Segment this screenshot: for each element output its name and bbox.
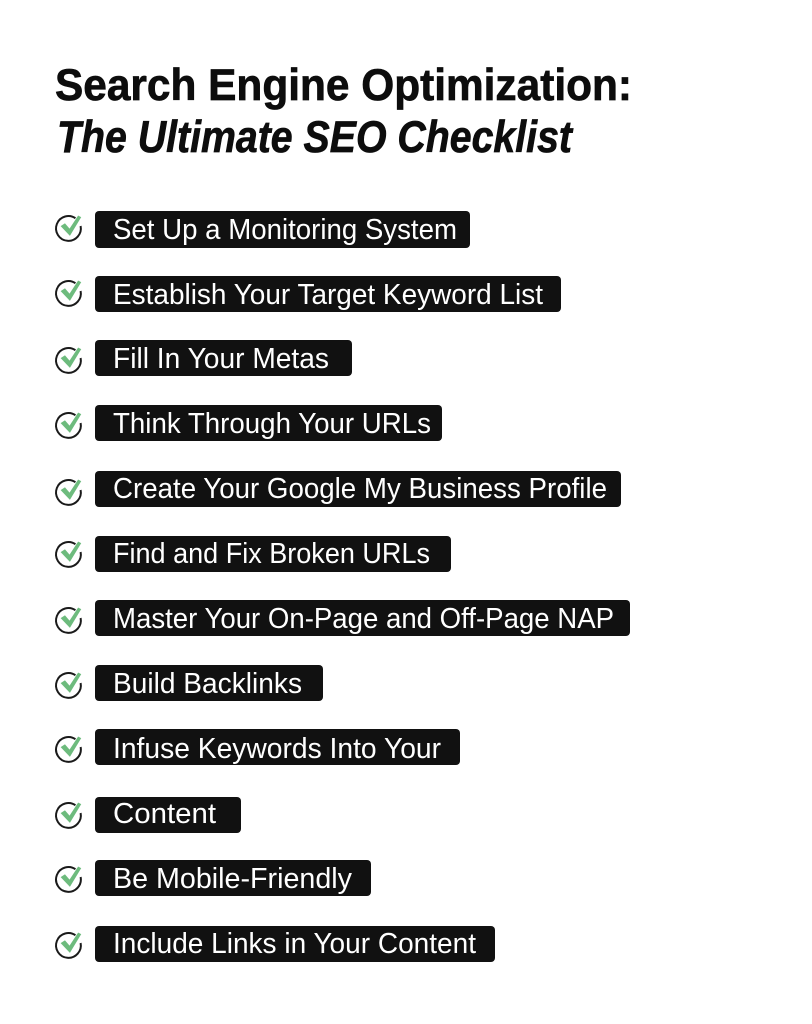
checklist item 1: Set Up a Monitoring System	[113, 214, 457, 246]
checklist item 4: Think Through Your URLs	[113, 408, 431, 440]
checklist item 6: Find and Fix Broken URLs	[113, 538, 430, 570]
checklist item 12: Include Links in Your Content	[113, 928, 476, 960]
checklist item 8: Build Backlinks	[113, 668, 302, 700]
checklist item 8	[56, 665, 323, 701]
checklist item 7: Master Your On-Page and Off-Page NAP	[113, 603, 614, 635]
title: The Ultimate SEO Checklist	[57, 113, 574, 162]
title: Search Engine Optimization:	[55, 61, 632, 110]
title	[55, 61, 632, 162]
checklist item 11: Be Mobile-Friendly	[113, 863, 353, 895]
checklist item 10: Content	[113, 798, 216, 830]
checklist item 2: Establish Your Target Keyword List	[113, 279, 543, 311]
checklist item 9: Infuse Keywords Into Your	[113, 733, 441, 765]
checklist item 11	[56, 860, 371, 896]
checklist item 3: Fill In Your Metas	[113, 343, 329, 375]
checklist item 10	[56, 797, 241, 833]
checklist item 3	[56, 340, 352, 376]
checklist item 5: Create Your Google My Business Profile	[113, 473, 607, 505]
